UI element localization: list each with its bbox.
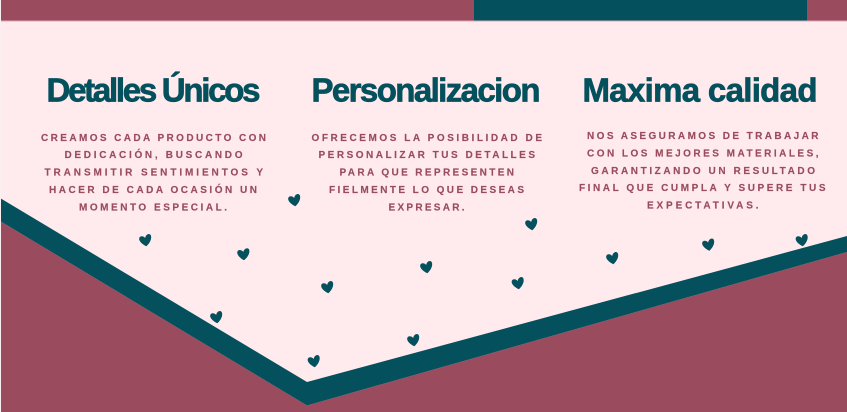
icon: heart: [139, 234, 152, 247]
text block: ofrecemos: OFRECEMOS LA POSIBILIDAD DE: [312, 133, 542, 144]
text block: nos aseguramos: CON LOS MEJORES MATERIALES,: [587, 148, 819, 160]
maroon bottom shape: [0, 221, 847, 412]
heading: Maxima calidad: Maxima calidad: [582, 72, 818, 108]
icon: heart: [237, 248, 250, 261]
icons: hearts: [139, 194, 809, 368]
text block: creamos: [41, 133, 266, 214]
text block: creamos: DEDICACIÓN, BUSCANDO: [64, 148, 243, 161]
icon: heart: [321, 281, 334, 294]
text block: nos aseguramos: [579, 131, 826, 212]
top bar: [0, 0, 847, 22]
icon: heart: [210, 311, 223, 324]
text block: creamos: TRANSMITIR SENTIMIENTOS Y: [44, 168, 263, 178]
icon: heart: [525, 218, 538, 231]
text block: nos aseguramos: FINAL QUE CUMPLA Y SUPERE TUS: [579, 183, 826, 194]
heading: Personalizacion: Personalizacion: [312, 72, 540, 108]
text block: creamos: CREAMOS CADA PRODUCTO CON: [41, 133, 266, 144]
icon: heart: [606, 252, 619, 265]
teal chevron band: [0, 198, 847, 406]
icon: heart: [407, 334, 420, 347]
icon: heart: [288, 194, 301, 207]
text block: ofrecemos: PARA QUE REPRESENTEN: [340, 168, 514, 178]
icon: heart: [795, 234, 809, 247]
text block: creamos: HACER DE CADA OCASIÓN UN: [49, 183, 257, 196]
text block: ofrecemos: FIELMENTE LO QUE DESEAS: [329, 185, 524, 196]
text block: creamos: MOMENTO ESPECIAL.: [79, 202, 227, 214]
text block: nos aseguramos: GARANTIZANDO UN RESULTADO: [591, 166, 815, 177]
icon: heart: [511, 277, 525, 290]
text block: nos aseguramos: EXPECTATIVAS.: [647, 200, 759, 212]
text block: ofrecemos: PERSONALIZAR TUS DETALLES: [318, 150, 535, 161]
icon: heart: [702, 238, 715, 252]
text block: ofrecemos: [312, 133, 542, 214]
icon: heart: [420, 261, 433, 274]
heading: Detalles Únicos: Detalles Únicos: [46, 72, 260, 108]
text block: ofrecemos: EXPRESAR.: [388, 202, 465, 214]
text block: nos aseguramos: NOS ASEGURAMOS DE TRABAJAR: [587, 131, 819, 142]
icon: heart: [307, 355, 321, 368]
